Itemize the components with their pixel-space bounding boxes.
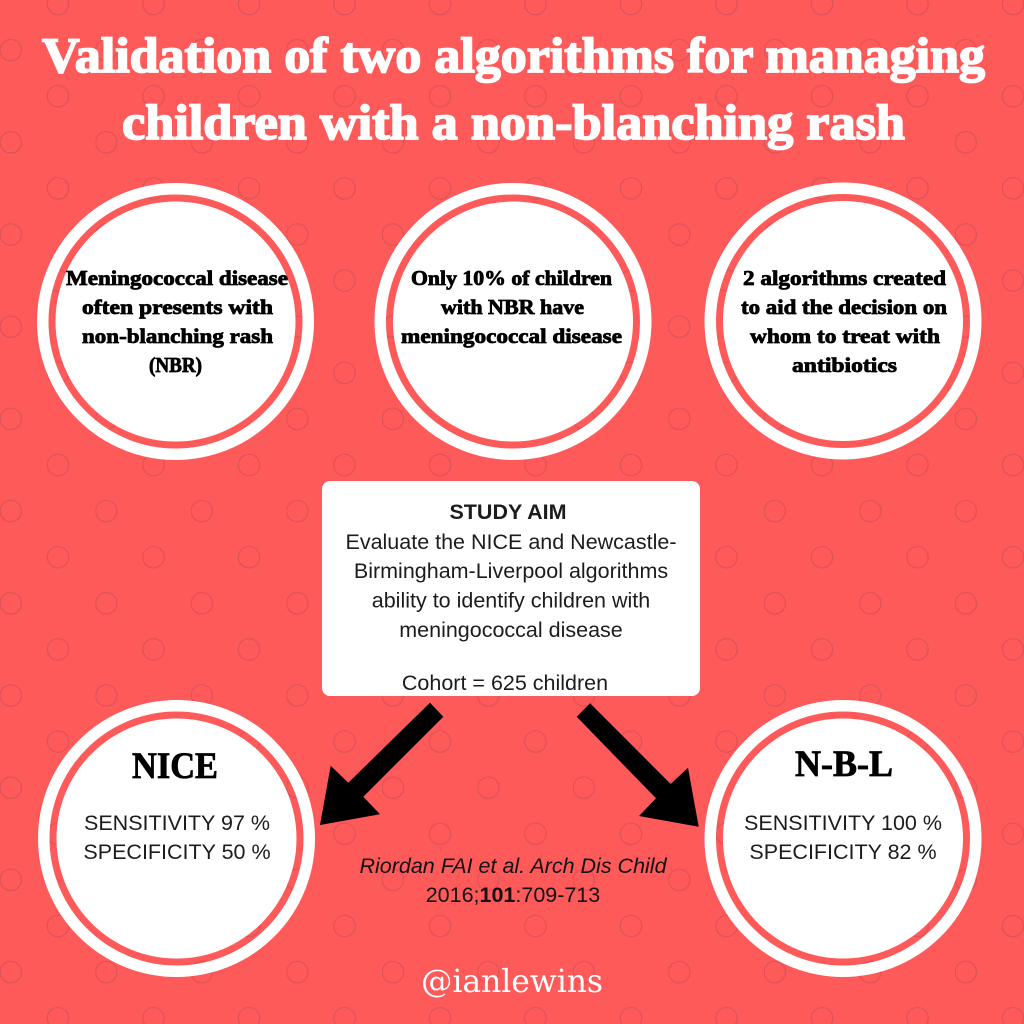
panel: N-B-L results: N-B-L: [795, 744, 893, 785]
citation: 2016;101:709-713: [426, 883, 600, 907]
citation: Riordan FAI et al. Arch Dis Child: [359, 854, 668, 878]
panel: study aim: STUDY AIM: [449, 500, 567, 524]
panel: meningococcal disease fact: (NBR): [149, 353, 202, 377]
panel: meningococcal disease fact: Meningococcal disease: [66, 266, 288, 290]
panel: 10 percent fact: meningococcal disease: [401, 324, 622, 348]
panel: study aim: [322, 481, 700, 696]
panel: NICE results: NICE: [132, 746, 218, 787]
panel: N-B-L results: [710, 706, 976, 971]
panel: study aim: Birmingham-Liverpool algorithms: [354, 559, 668, 583]
panel: study aim: meningococcal disease: [399, 618, 623, 642]
panel: meningococcal disease fact: often presents with: [82, 295, 273, 319]
panel: study aim: Cohort = 625 children: [402, 671, 608, 695]
panel: 10 percent fact: [380, 189, 646, 454]
panel: NICE results: SENSITIVITY 97 %: [84, 811, 270, 835]
panel: meningococcal disease fact: [43, 189, 308, 454]
panel: meningococcal disease fact: non-blanching rash: [82, 324, 273, 348]
title: Validation of two algorithms for managing: [42, 27, 985, 83]
panel: 10 percent fact: Only 10% of children: [411, 266, 612, 290]
arrow: to NICE: [320, 703, 443, 825]
panel: NICE results: SPECIFICITY 50 %: [83, 840, 271, 864]
panel: N-B-L results: SENSITIVITY 100 %: [744, 811, 942, 835]
panel: two algorithms fact: 2 algorithms created: [743, 266, 946, 290]
title: children with a non-blanching rash: [122, 94, 905, 150]
panel: two algorithms fact: whom to treat with: [750, 324, 940, 348]
panel: N-B-L results: SPECIFICITY 82 %: [749, 840, 937, 864]
panel: two algorithms fact: antibiotics: [792, 353, 897, 377]
panel: study aim: ability to identify children with: [372, 588, 650, 612]
title: [42, 27, 985, 150]
author handle: @ianlewins: [421, 962, 603, 1000]
panel: NICE results: [44, 706, 309, 971]
panel: study aim: Evaluate the NICE and Newcastle-: [345, 530, 677, 554]
citation: [359, 854, 668, 907]
panel: two algorithms fact: to aid the decision on: [741, 295, 947, 319]
arrow: to N-B-L: [577, 703, 699, 827]
panel: 10 percent fact: with NBR have: [441, 295, 584, 319]
panel: two algorithms fact: [710, 188, 976, 454]
